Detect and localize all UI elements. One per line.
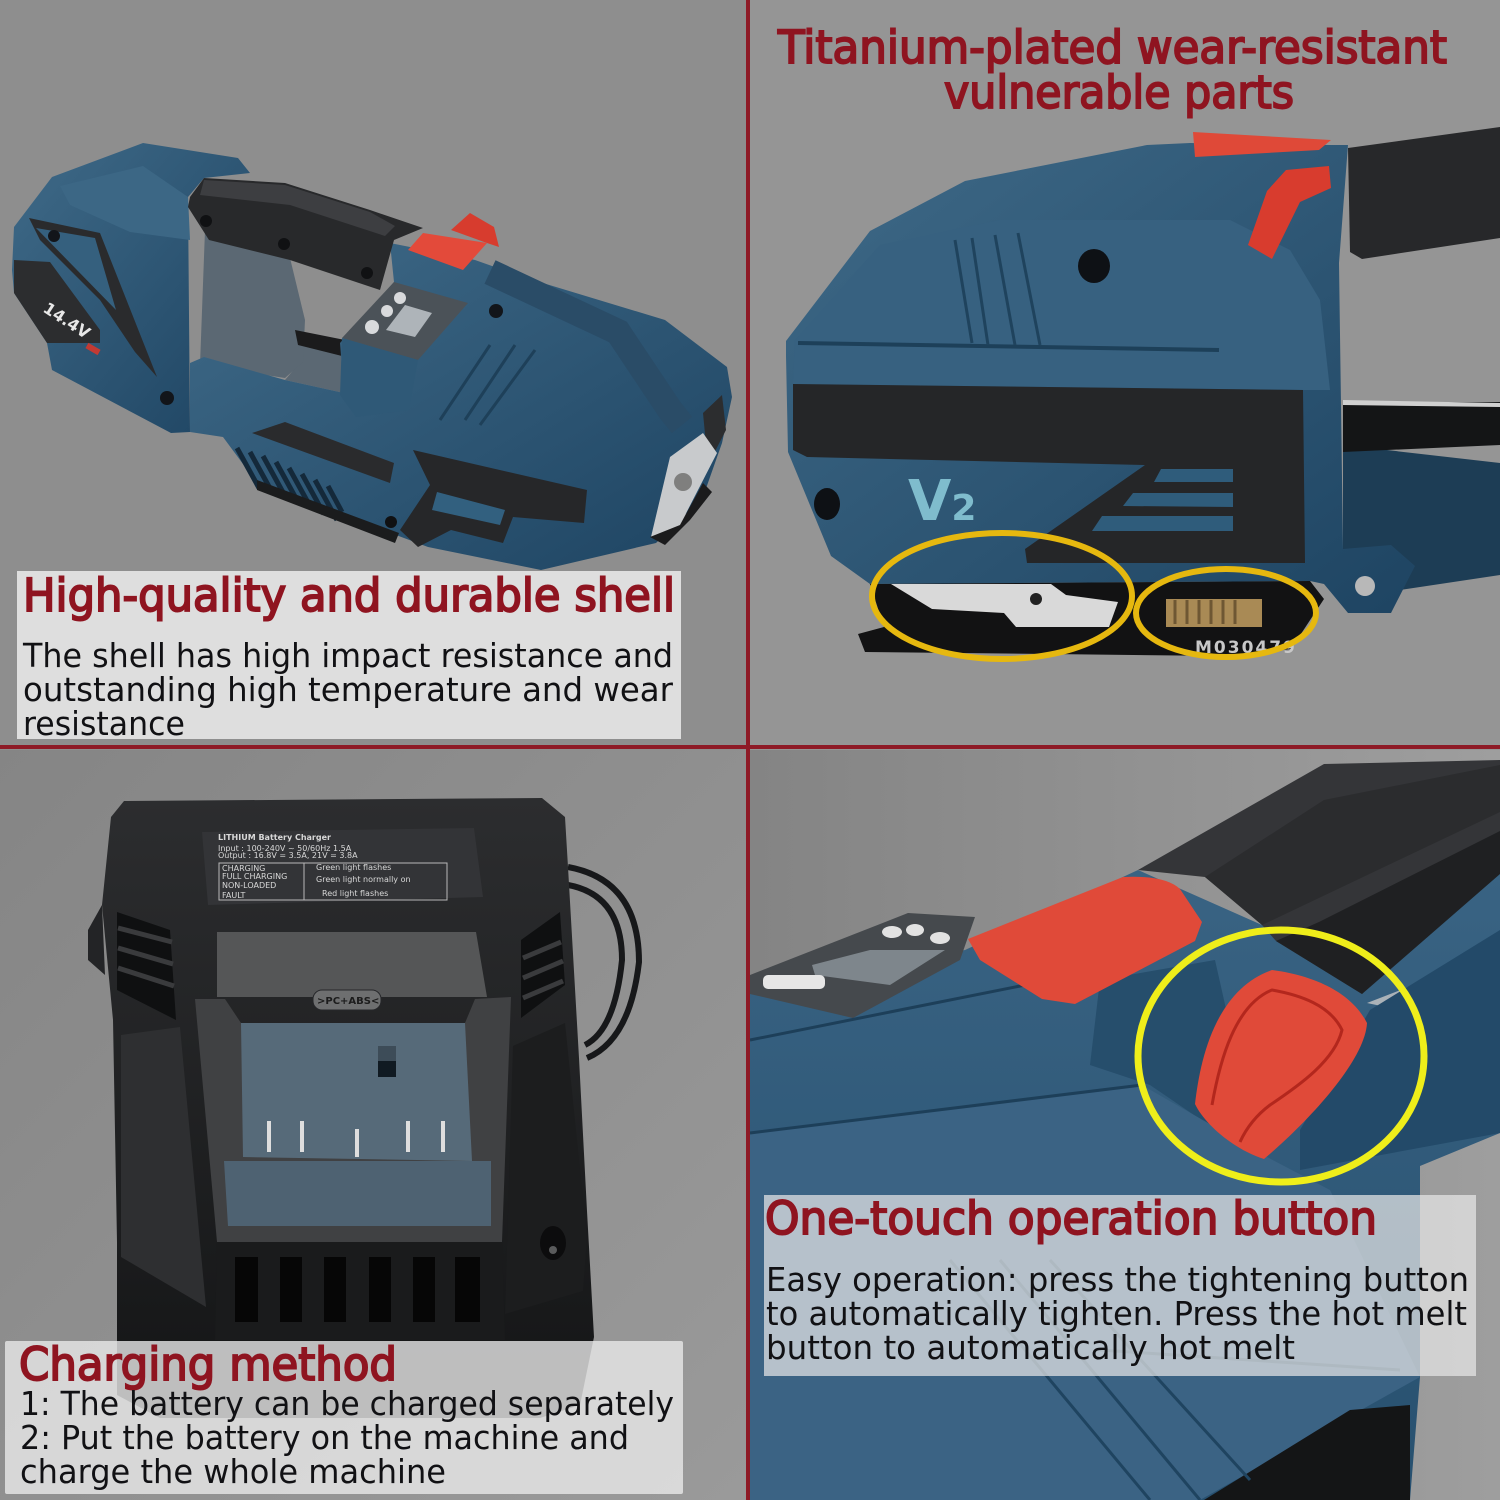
body text: 2: Put the battery on the machine and [20, 1418, 629, 1457]
panel: durable shell [12, 143, 732, 743]
text block: charging [5, 1338, 683, 1494]
heading: One-touch operation button [765, 1192, 1377, 1245]
body text [20, 1384, 674, 1491]
illustration: charger [88, 798, 639, 1418]
illustration: charger: Green light normally on [316, 875, 411, 884]
body text: 1: The battery can be charged separately [20, 1384, 674, 1423]
illustration: charger: Red light flashes [322, 889, 388, 898]
body text: charge the whole machine [20, 1452, 446, 1491]
heading [777, 21, 1447, 119]
illustration: charger: FULL CHARGING [222, 872, 287, 881]
body text: outstanding high temperature and wear [23, 670, 673, 709]
text block: shell description [17, 569, 681, 743]
illustration: tool close-up [786, 127, 1500, 659]
body text [22, 636, 673, 743]
illustration: strapping tool [12, 143, 732, 570]
illustration: charger: FAULT [222, 891, 246, 900]
illustration: charger: >PC+ABS< [317, 996, 379, 1007]
panel: one-touch button [750, 760, 1500, 1500]
callout: button ring [1138, 930, 1424, 1182]
body text: resistance [23, 704, 185, 743]
heading: vulnerable parts [944, 66, 1294, 119]
illustration: charger: NON-LOADED [222, 881, 276, 890]
illustration: charger: Input : 100-240V ~ 50/60Hz 1.5A [218, 844, 352, 853]
illustration: charger: Green light flashes [316, 863, 391, 872]
body text: button to automatically hot melt [766, 1328, 1295, 1367]
illustration: tool close-up: M030479 [1195, 638, 1297, 658]
illustration: strapping tool: 14.4V [40, 298, 94, 343]
illustration: tool close-up: V2 [908, 469, 976, 534]
illustration: charger: LITHIUM Battery Charger [218, 833, 331, 842]
body text: The shell has high impact resistance and [22, 636, 673, 675]
heading: Titanium-plated wear-resistant [777, 21, 1447, 74]
body text: Easy operation: press the tightening button [766, 1260, 1469, 1299]
heading: Charging method [19, 1338, 397, 1391]
text block: button [764, 1192, 1476, 1376]
callout: teeth ring [1136, 569, 1316, 657]
panel: charging method [5, 798, 683, 1494]
body text: to automatically tighten. Press the hot melt [766, 1294, 1467, 1333]
panel: titanium parts [777, 21, 1500, 659]
body text [766, 1260, 1469, 1367]
illustration: charger: Output : 16.8V = 3.5A, 21V = 3.8A [218, 851, 358, 860]
callout: cutter ring [872, 533, 1132, 659]
illustration: button close-up [750, 760, 1500, 1500]
illustration: charger: CHARGING [222, 864, 265, 873]
heading: High-quality and durable shell [23, 569, 675, 622]
